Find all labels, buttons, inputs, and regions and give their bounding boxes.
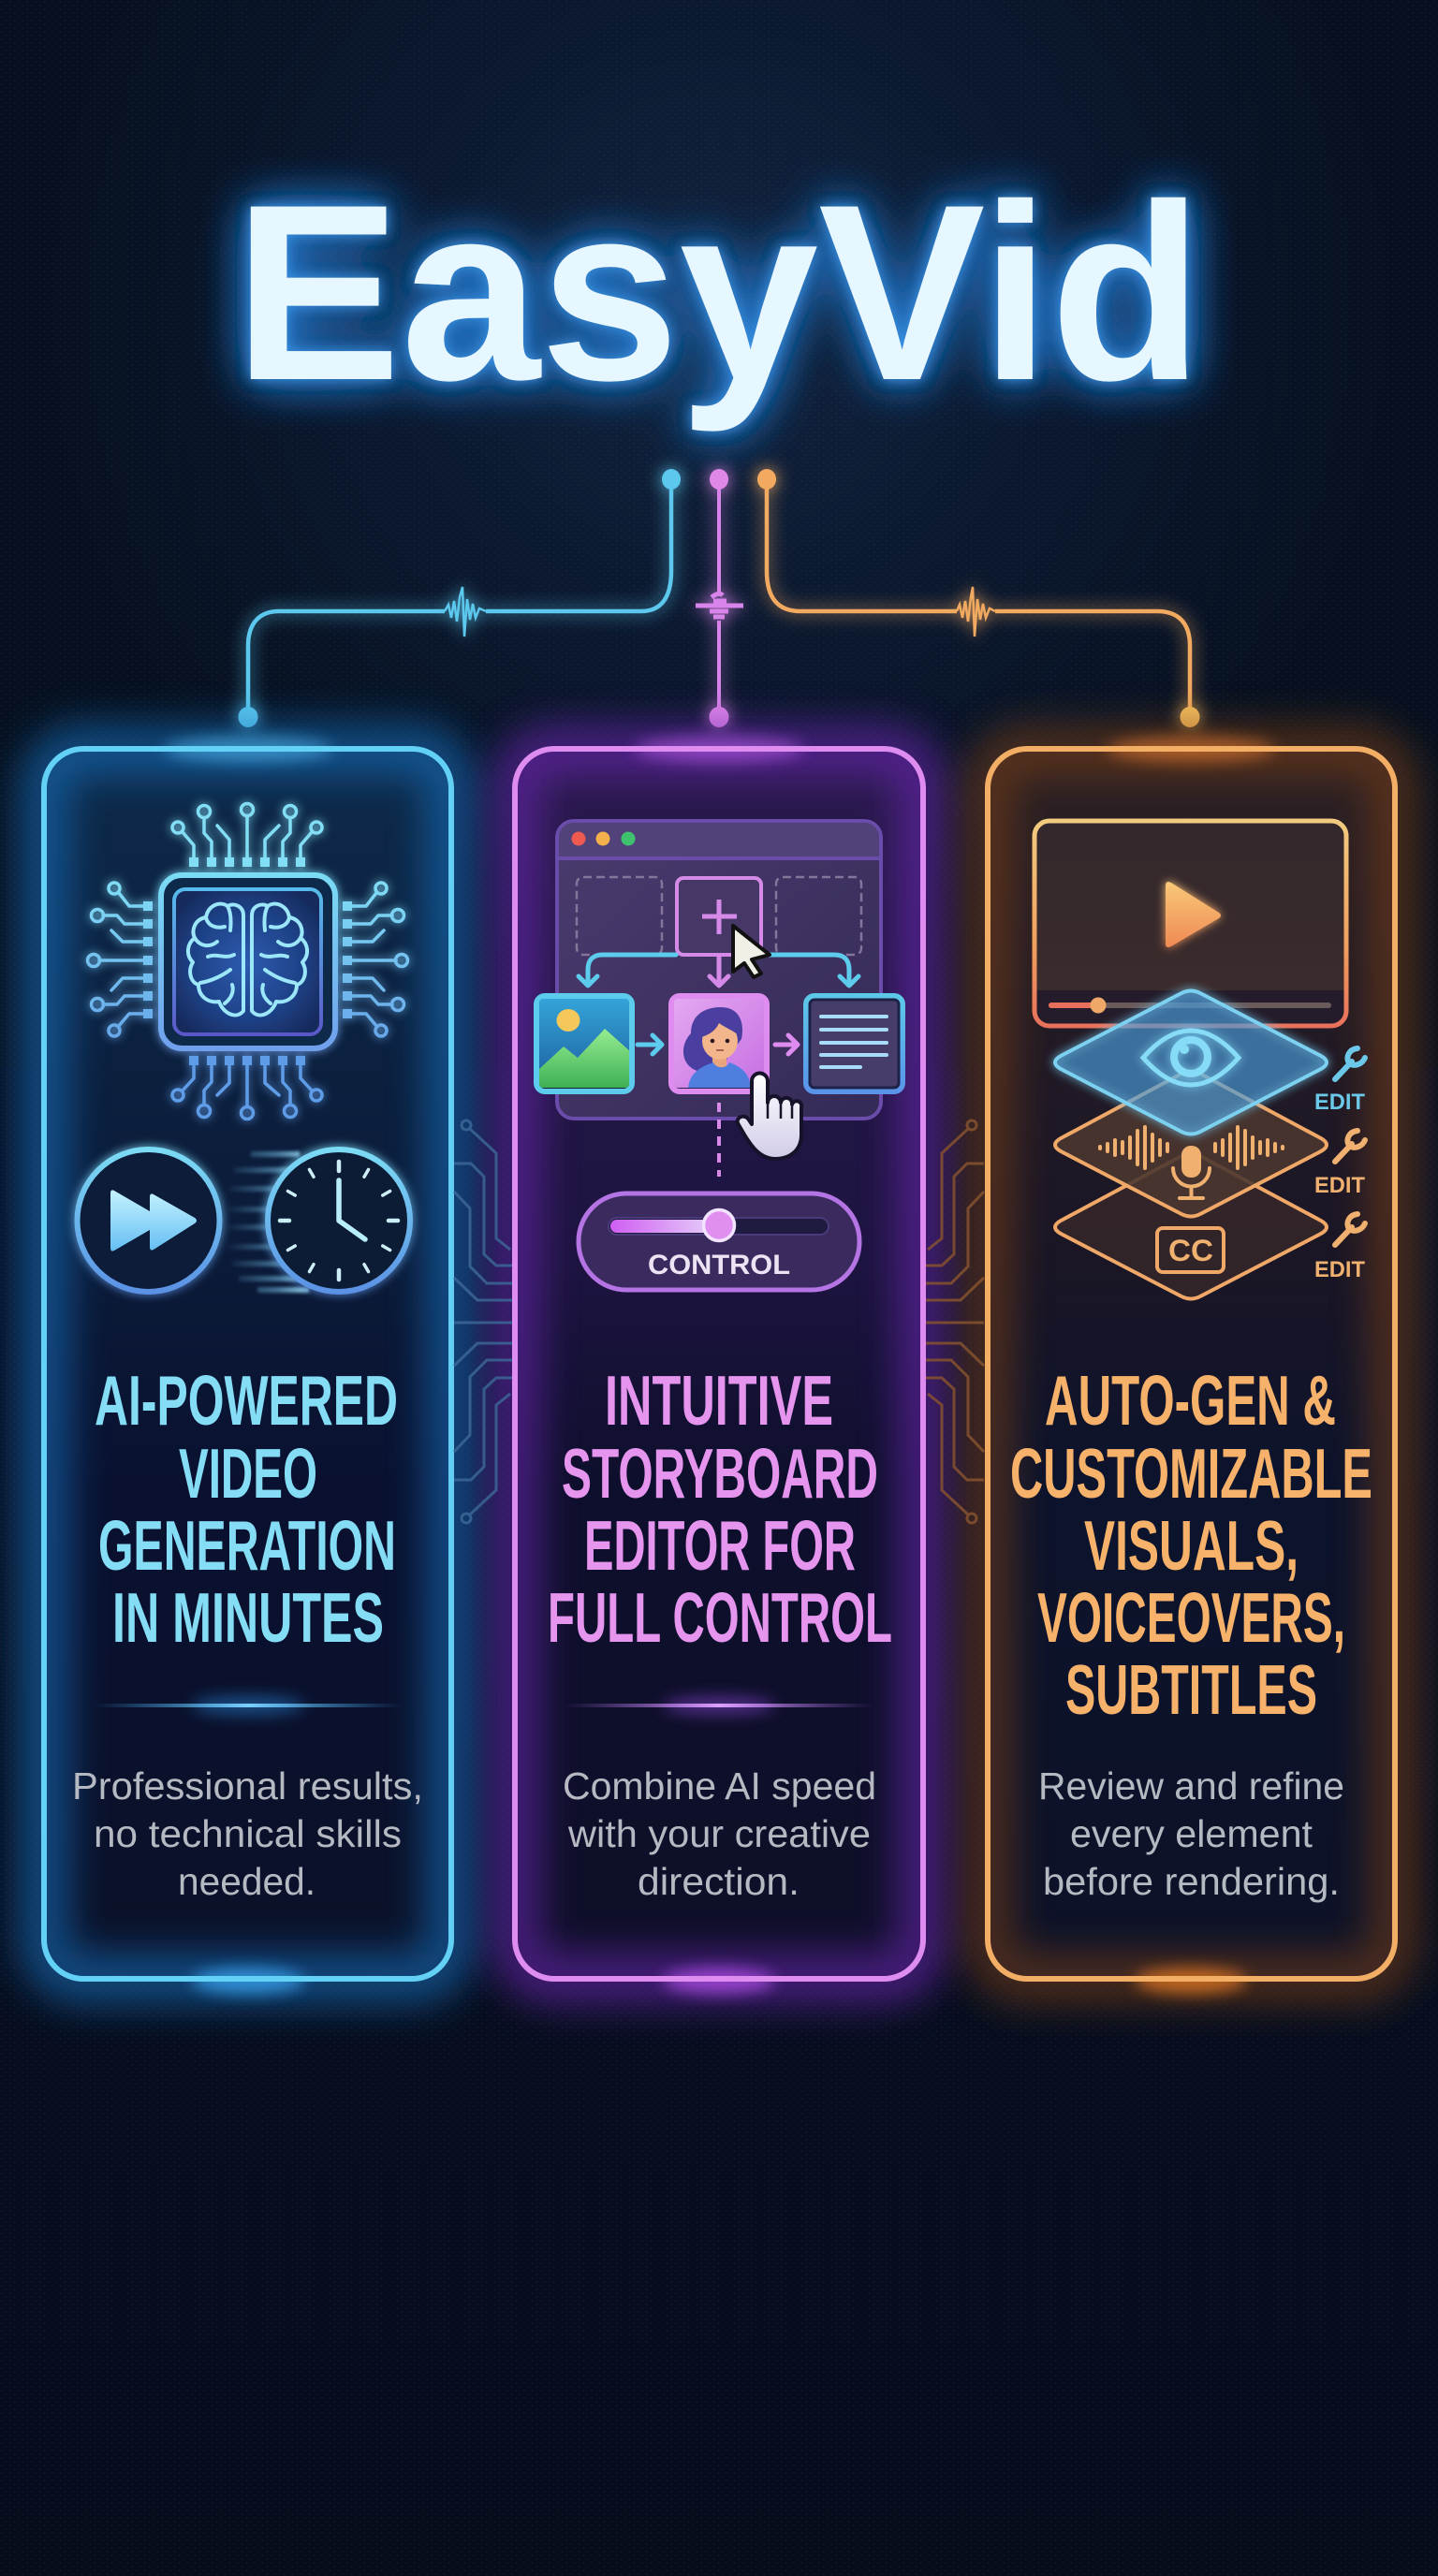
connector: purple line to card 2 <box>696 469 743 727</box>
layer: visuals <box>1055 990 1327 1134</box>
arrows: storyboard flow <box>579 955 858 1054</box>
dotted connector <box>717 1103 721 1177</box>
circuit traces: left gap <box>454 1120 512 1523</box>
icon: wrench edit, visuals <box>1314 1048 1365 1115</box>
speed lines <box>225 1154 309 1290</box>
heading: storyboard editor: EDITOR FOR <box>584 1506 856 1585</box>
icon: storyboard window <box>557 821 881 1119</box>
icon: clock <box>268 1149 410 1292</box>
heading: AI-powered video generation: IN MINUTES <box>112 1578 384 1657</box>
icon: fast-forward button <box>77 1149 219 1292</box>
body text: card 2 <box>563 1764 876 1903</box>
body text: card 3 <box>1038 1764 1344 1903</box>
layer: captions: CC <box>1168 1234 1213 1267</box>
connector: orange line to card 3 <box>757 469 1200 727</box>
title: EasyVid: EasyVid <box>234 152 1203 434</box>
icon: wrench edit, captions <box>1314 1214 1365 1282</box>
control slider pill: CONTROL <box>648 1250 790 1281</box>
body text: card 1: no technical skills <box>94 1812 402 1855</box>
icon: AI chip with brain <box>88 803 408 1120</box>
heading: storyboard editor: STORYBOARD <box>562 1434 878 1513</box>
heading: auto-gen and customizable: VISUALS, <box>1084 1506 1299 1585</box>
heading: storyboard editor: FULL CONTROL <box>548 1578 892 1657</box>
icon: wrench edit, visuals: EDIT <box>1314 1090 1365 1115</box>
heading: storyboard editor: INTUITIVE <box>605 1361 833 1440</box>
layer: voiceover <box>1055 1071 1327 1217</box>
body text: card 3: Review and refine <box>1038 1764 1344 1808</box>
body text: card 1: Professional results, <box>72 1764 423 1808</box>
body text: card 1: needed. <box>178 1860 315 1903</box>
body text: card 1 <box>72 1764 423 1903</box>
control slider pill <box>579 1193 859 1290</box>
icon: document card <box>806 996 902 1091</box>
panel: auto-gen and customizable <box>988 736 1395 1994</box>
icon: image card <box>536 996 632 1091</box>
body text: card 2: direction. <box>638 1860 800 1903</box>
body text: card 3: every element <box>1070 1812 1313 1855</box>
connector: blue line to card 1 <box>238 469 681 727</box>
layer: captions <box>1055 1153 1327 1299</box>
divider: blue <box>94 1696 403 1715</box>
heading: storyboard editor <box>548 1361 892 1657</box>
heading: auto-gen and customizable <box>1010 1361 1372 1729</box>
body text: card 2: with your creative <box>567 1812 871 1855</box>
icon: wrench edit, voiceover <box>1314 1131 1365 1198</box>
panel: AI-powered video generation <box>44 736 451 1994</box>
icon: person card <box>671 996 767 1091</box>
heading: AI-powered video generation: GENERATION <box>98 1506 396 1585</box>
body text: card 2: Combine AI speed <box>563 1764 876 1808</box>
icon: pointing hand <box>738 1073 801 1159</box>
heading: AI-powered video generation: AI-POWERED <box>95 1361 398 1440</box>
icon: mouse cursor <box>733 926 770 977</box>
panel: storyboard editor <box>515 736 923 1994</box>
heading: AI-powered video generation <box>95 1361 398 1657</box>
circuit traces: right gap <box>926 1120 984 1523</box>
icon: video player <box>1034 821 1346 1026</box>
divider: purple <box>564 1696 875 1715</box>
icon: wrench edit, voiceover: EDIT <box>1314 1173 1365 1198</box>
body text: card 3: before rendering. <box>1043 1860 1340 1903</box>
heading: AI-powered video generation: VIDEO <box>179 1434 317 1513</box>
icon: wrench edit, captions: EDIT <box>1314 1257 1365 1282</box>
